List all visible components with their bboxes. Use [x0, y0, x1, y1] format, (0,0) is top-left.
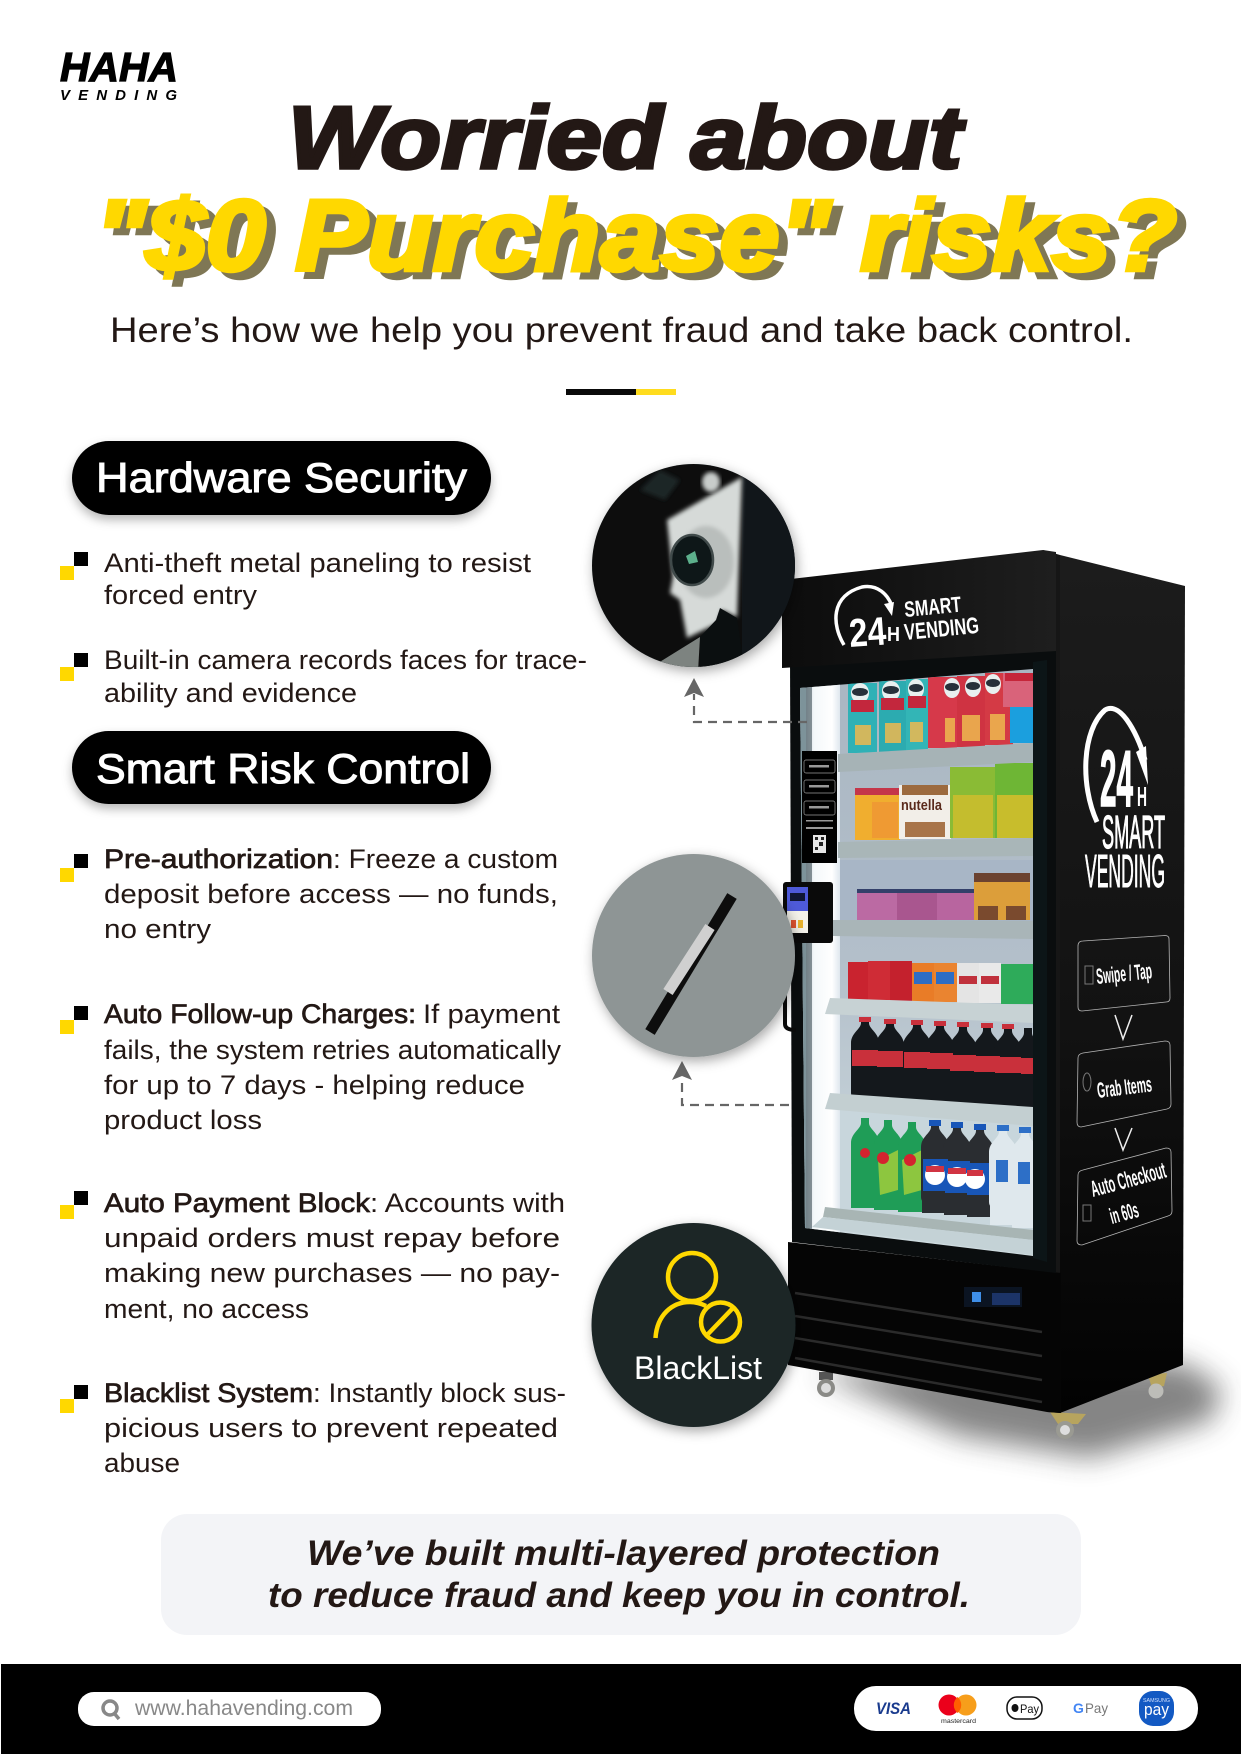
callout: summary: We’ve built multi-layered protection — [307, 1534, 940, 1573]
bullet: auto payment block: : Accounts with — [370, 1188, 565, 1218]
payment methods pill: G — [1073, 1700, 1084, 1716]
callout: summary: to reduce fraud and keep you in control. — [268, 1576, 970, 1615]
icon: blocked user — [656, 1253, 740, 1342]
door frame — [790, 640, 1056, 1273]
header logo: VENDING — [903, 612, 980, 645]
shelf 2 products: snacks: nutella — [901, 797, 943, 814]
subtitle: Here’s how we help you prevent fraud and take back control. — [110, 311, 1133, 350]
header logo: 24 — [848, 609, 888, 656]
bullet: anti-theft: Anti-theft metal paneling to resist — [104, 548, 532, 578]
bullet: pre-authorization: deposit before access — no funds, — [104, 879, 558, 909]
bullet: auto follow-up charges: Auto Follow-up Charges: — [104, 999, 416, 1029]
circle: metal panel close-up — [592, 854, 795, 1057]
door handle — [785, 940, 796, 1030]
casters — [817, 1372, 1167, 1439]
footer bar — [1, 1664, 1241, 1754]
shelf 5 products: cola bottles — [851, 1017, 1042, 1108]
website pill — [78, 1692, 381, 1726]
vending machine — [782, 550, 1222, 1458]
shelf 2 products: snacks — [855, 763, 1033, 840]
header panel — [782, 550, 1056, 668]
bullet: auto payment block — [60, 1188, 565, 1324]
callout: summary — [161, 1514, 1081, 1635]
divider — [566, 389, 676, 395]
shelf 4 products: soda cans — [848, 961, 1033, 1004]
title line 2 with shadow: "$0 Purchase" risks? — [104, 187, 1186, 299]
logo: HAHA Vending: VENDING — [60, 87, 177, 104]
shelf 3 products: tubs and boxes — [857, 873, 1030, 920]
side return strip — [1043, 550, 1060, 1413]
shelf 1 products: chip cans — [848, 673, 1033, 753]
arrow: camera callout — [684, 678, 807, 722]
payment methods pill: pay — [1144, 1700, 1169, 1719]
heading: Hardware Security — [72, 441, 491, 515]
bullet: auto follow-up charges: fails, the system retries automatically — [104, 1035, 562, 1065]
bullet: blacklist system: picious users to prevent repeated — [104, 1413, 558, 1443]
heading: Hardware Security: Hardware Security — [96, 454, 467, 501]
side logo: 24 — [1100, 734, 1133, 823]
arrow: metal panel callout — [672, 1061, 789, 1105]
instruction sign on door — [802, 751, 837, 863]
side steps — [1077, 936, 1172, 1245]
website pill: www.hahavending.com — [134, 1697, 353, 1720]
bullet: blacklist system — [60, 1378, 566, 1478]
side steps: in 60s — [1107, 1197, 1141, 1229]
glass interior — [800, 660, 1042, 1260]
bullet: auto payment block: unpaid orders must repay before — [104, 1223, 560, 1253]
bullet: auto follow-up charges: for up to 7 days - helping reduce — [104, 1070, 525, 1100]
bullet: auto payment block: ment, no access — [104, 1294, 309, 1324]
header logo — [836, 586, 980, 656]
header logo: SMART — [903, 592, 963, 622]
payment methods pill — [854, 1686, 1198, 1731]
side logo — [1085, 708, 1165, 897]
bullet: auto follow-up charges: If payment — [423, 999, 561, 1029]
heading: Smart Risk Control — [72, 731, 491, 804]
circle: blacklist — [592, 1223, 796, 1427]
bullet: blacklist system: abuse — [104, 1448, 180, 1478]
heading: Smart Risk Control: Smart Risk Control — [96, 745, 470, 792]
bullet: pre-authorization — [60, 844, 558, 944]
payment reader — [783, 882, 833, 943]
side logo: H — [1137, 781, 1147, 812]
bullet: camera: Built-in camera records faces for trace- — [104, 645, 587, 675]
side steps: Grab Items — [1096, 1071, 1153, 1103]
circle: blacklist: BlackList — [634, 1350, 762, 1386]
floor shadow — [815, 1362, 1222, 1458]
base unit with vents — [788, 1242, 1061, 1413]
payment methods pill: SAMSUNG — [1143, 1698, 1170, 1704]
bullet: auto follow-up charges — [60, 999, 562, 1135]
title line 1: Worried about — [288, 88, 966, 187]
bullet: anti-theft: forced entry — [104, 580, 258, 610]
circle: camera close-up — [592, 462, 802, 672]
bullet: auto payment block: making new purchases — no pay- — [104, 1258, 560, 1288]
bullet: blacklist system: : Instantly block sus- — [313, 1378, 566, 1408]
bullet: anti-theft — [60, 548, 532, 610]
payment methods pill: mastercard — [941, 1719, 976, 1725]
bullet: pre-authorization: : Freeze a custom — [333, 844, 558, 874]
bullet: blacklist system: Blacklist System — [104, 1378, 313, 1408]
header logo: H — [887, 624, 900, 646]
side panel — [1060, 555, 1185, 1413]
bullet: auto follow-up charges: product loss — [104, 1105, 262, 1135]
logo: HAHA Vending: HAHA — [60, 44, 178, 90]
shelf 6 products: soda and water bottles — [851, 1118, 1039, 1228]
side steps: Swipe / Tap — [1095, 958, 1153, 989]
title line 2 with shadow: "$0 Purchase" risks? — [95, 180, 1177, 292]
bullet: auto payment block: Auto Payment Block — [104, 1188, 371, 1218]
payment methods pill: Pay — [1020, 1702, 1039, 1716]
bullet: pre-authorization: Pre-authorization — [104, 844, 333, 874]
shelves — [812, 743, 1033, 1255]
bullet: camera: ability and evidence — [104, 678, 357, 708]
payment methods pill: VISA — [876, 1699, 911, 1718]
bullet: pre-authorization: no entry — [104, 914, 212, 944]
payment methods pill: Pay — [1085, 1700, 1108, 1716]
bullet: camera — [60, 645, 587, 708]
